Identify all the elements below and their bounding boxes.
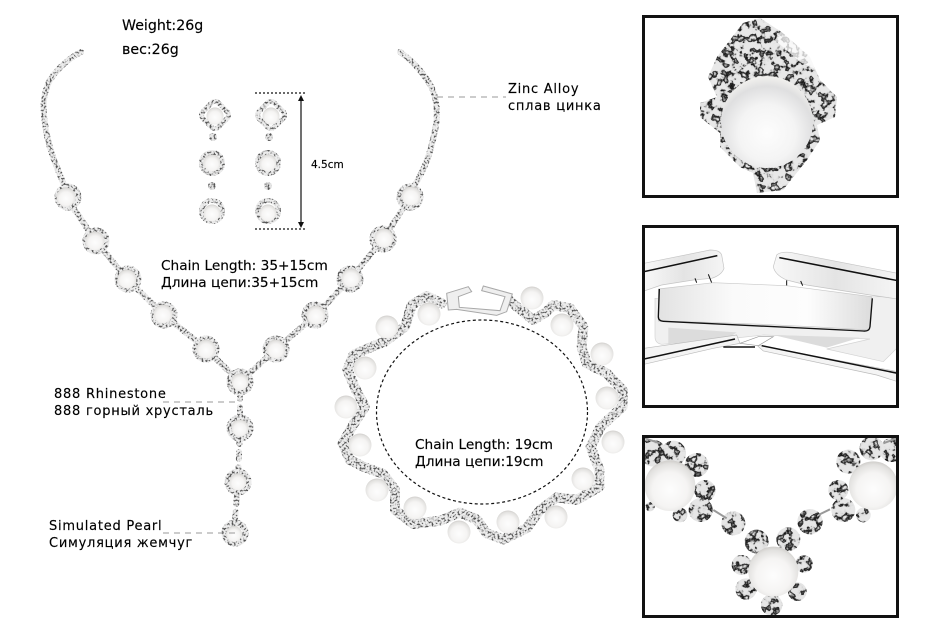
zinc alloy callout bbox=[437, 82, 602, 114]
zinc alloy callout: сплав цинка bbox=[508, 99, 602, 114]
bracelet chain length label: Chain Length: 19cm bbox=[415, 437, 553, 453]
panel: clasp close-up bbox=[644, 226, 898, 406]
rhinestone callout: 888 Rhinestone bbox=[54, 387, 167, 402]
panel: necklace centre close-up bbox=[638, 436, 904, 616]
necklace chain length label bbox=[161, 258, 328, 291]
simulated pearl callout: Симуляция жемчуг bbox=[49, 536, 193, 551]
earring size label: 4.5cm bbox=[311, 159, 344, 171]
necklace bbox=[44, 52, 437, 544]
bracelet inner dashed circle bbox=[376, 320, 588, 504]
bracelet bbox=[334, 286, 624, 544]
rhinestone callout bbox=[54, 387, 240, 419]
weight label bbox=[122, 18, 203, 58]
weight label: вес:26g bbox=[122, 42, 179, 58]
bracelet chain length label: Длина цепи:19cm bbox=[415, 454, 544, 470]
earrings bbox=[199, 99, 287, 222]
simulated pearl callout: Simulated Pearl bbox=[49, 519, 162, 534]
earring size dimension arrow bbox=[255, 93, 306, 229]
zinc alloy callout: Zinc Alloy bbox=[508, 82, 579, 97]
bracelet chain length label bbox=[415, 437, 553, 470]
necklace chain length label: Chain Length: 35+15cm bbox=[161, 258, 328, 274]
panel: pearl close-up bbox=[644, 16, 898, 196]
weight label: Weight:26g bbox=[122, 18, 203, 34]
bracelet clasp bbox=[447, 286, 512, 315]
rhinestone callout: 888 горный хрусталь bbox=[54, 404, 214, 419]
simulated pearl callout bbox=[49, 519, 240, 551]
necklace chain length label: Длина цепи:35+15cm bbox=[161, 275, 318, 291]
